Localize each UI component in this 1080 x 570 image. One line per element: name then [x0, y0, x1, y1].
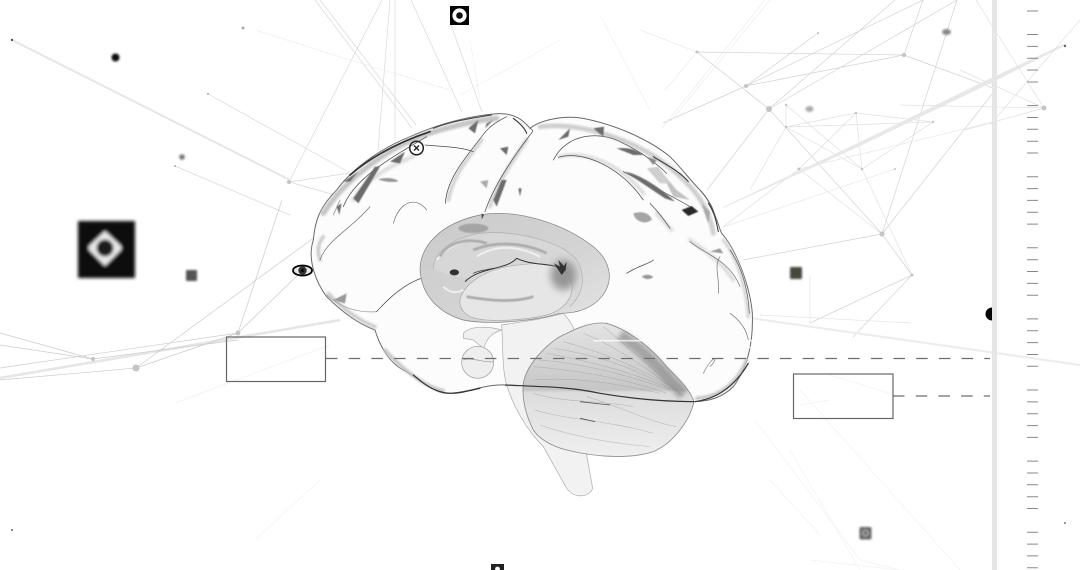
light streak [593, 341, 752, 347]
icon: small right target [860, 527, 872, 540]
dashed connector left [326, 358, 990, 360]
gyri creases [320, 115, 749, 402]
cerebellum [505, 323, 694, 456]
cerebrum [311, 114, 752, 402]
icon: eye [293, 266, 312, 276]
label box right [794, 374, 893, 418]
label box left [226, 337, 326, 382]
icon: bottom target [491, 564, 504, 570]
dark sulci marks [333, 120, 723, 303]
dashed connector right [893, 395, 990, 397]
icon: circled cross [410, 141, 423, 155]
brainstem [463, 313, 593, 496]
network lines: lower right and bottom [255, 375, 960, 570]
network lines: lower left [0, 200, 345, 403]
ruler ticks [1027, 11, 1038, 568]
network lines: upper right [640, 0, 1080, 365]
icon: small square right [790, 267, 802, 279]
black dot at bar [986, 308, 992, 320]
brain illustration [311, 114, 752, 496]
limbic structure [420, 213, 609, 322]
icon: large blurred target [78, 221, 135, 278]
soft gyri shading [318, 118, 748, 398]
icon: small square left [186, 270, 197, 281]
icon: top target [450, 6, 469, 25]
blurred dots [112, 29, 951, 160]
pineal ball [462, 346, 494, 378]
network lines: upper left and top [12, 0, 650, 215]
vertical bar [992, 0, 997, 570]
